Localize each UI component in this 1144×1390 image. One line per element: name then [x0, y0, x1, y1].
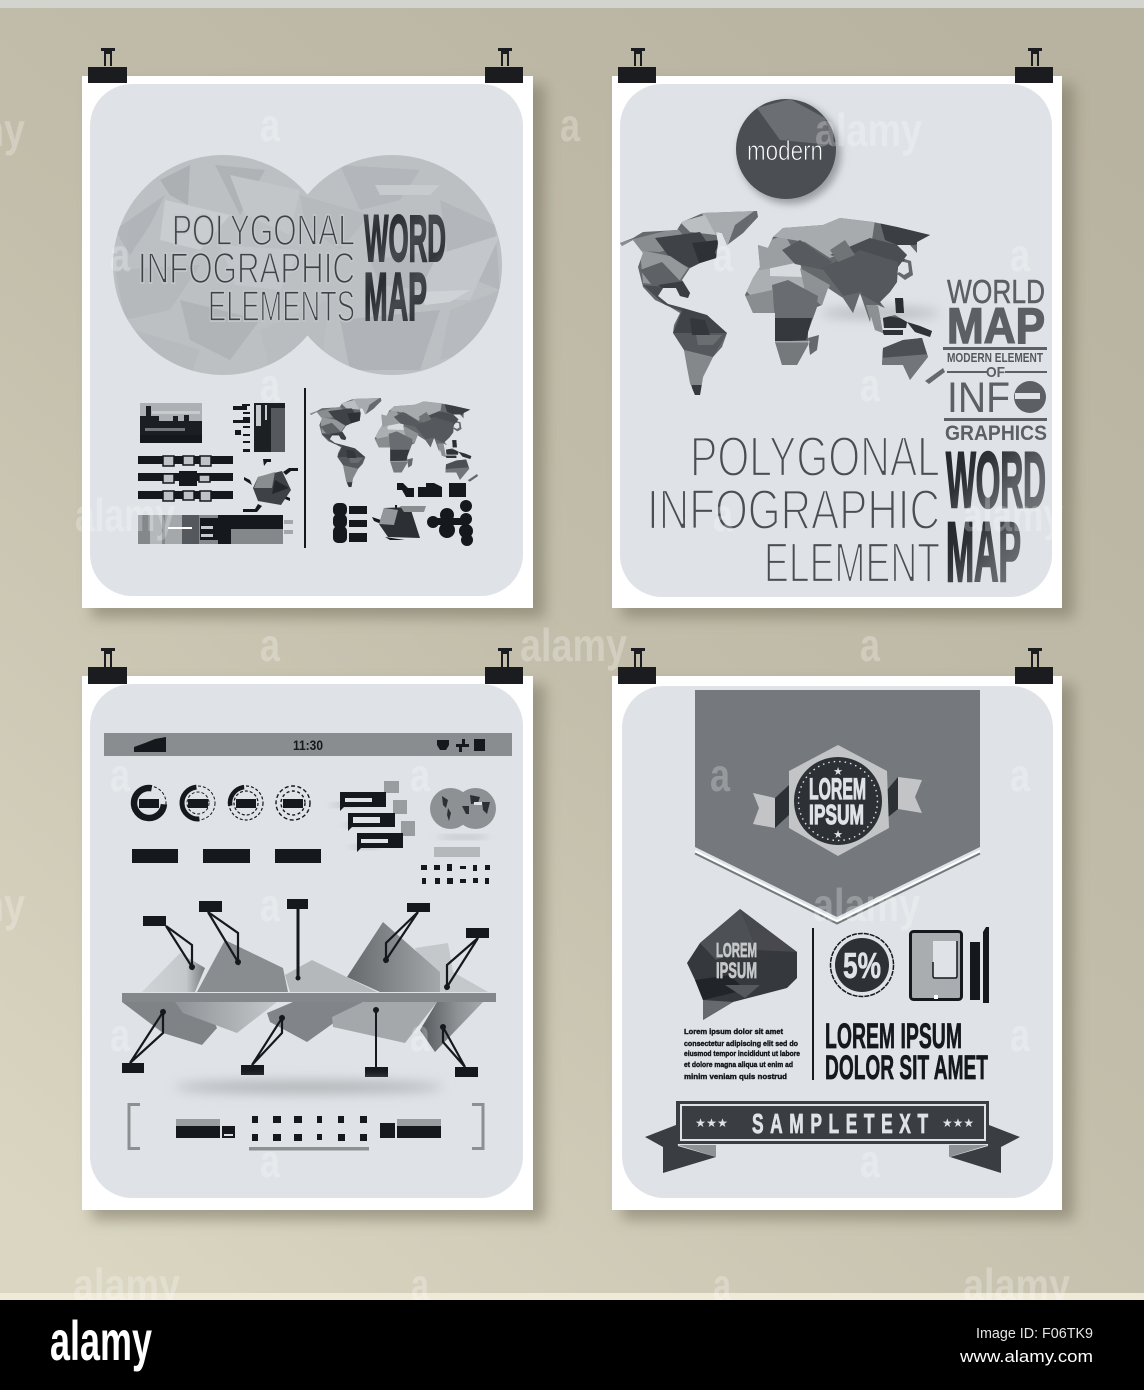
modern badge: modern: [747, 135, 823, 166]
five percent badge: 5%: [843, 945, 881, 986]
speech bubbles: [330, 781, 415, 852]
twin polygon circles: [110, 150, 510, 380]
mini list with icons: [333, 503, 367, 543]
watermarks: a: [1010, 1009, 1030, 1061]
world map lettering stack: MAP: [947, 298, 1045, 354]
progress rings: [132, 784, 310, 822]
world map lettering stack: OF: [986, 364, 1005, 381]
polygon word map lettering: MAP: [946, 505, 1021, 599]
headline: POLYGONAL: [690, 425, 940, 489]
watermarks: a: [713, 1259, 731, 1311]
poster shadows: [92, 84, 1074, 1220]
watermarks: alamy: [963, 1259, 1070, 1311]
headline: POLYGONAL: [172, 207, 355, 255]
map floor shadow: [820, 309, 940, 317]
watermarks: a: [260, 1135, 280, 1187]
hexagon badge: ★: [833, 766, 843, 778]
headline: [138, 207, 355, 331]
mini polygon burst: [372, 505, 426, 540]
modern badge: [736, 99, 841, 204]
mini node network: [427, 500, 473, 546]
lorem ipsum heading: LOREM IPSUM: [825, 1017, 962, 1056]
footer bar: alamy: [50, 1309, 152, 1372]
headline: ELEMENTS: [208, 283, 355, 331]
poster 3: interface elements: [82, 676, 533, 1210]
world map lettering stack: INF: [947, 374, 1010, 422]
watermarks: alamy: [75, 489, 175, 541]
body copy lines: et dolore magna aliqua ut enim ad: [684, 1060, 793, 1069]
watermarks: a: [110, 1009, 130, 1061]
watermarks: a: [1010, 229, 1030, 281]
footer bar: www.alamy.com: [959, 1347, 1093, 1366]
watermarks: alamy: [813, 879, 920, 931]
hexagon badge: LOREM: [809, 773, 866, 806]
status bar: [104, 733, 512, 756]
sampletext ribbon: SAMPLETEXT: [752, 1108, 928, 1139]
watermarks: alamy: [73, 1259, 180, 1311]
stacked bars panel: [138, 515, 293, 544]
world map: [615, 205, 950, 400]
body copy lines: eiusmod tempor incididunt ut labore: [684, 1049, 800, 1058]
watermarks: a: [260, 619, 280, 671]
bracketed footer legend: [129, 1104, 483, 1150]
poster 2: world map: [612, 76, 1062, 608]
watermarks: alamy: [520, 619, 627, 671]
watermarks: a: [260, 99, 280, 151]
polygon speech bubble: LOREM: [716, 940, 757, 962]
vertical divider: [812, 928, 814, 1080]
sampletext ribbon: [645, 1101, 1020, 1173]
small icon grid: [421, 864, 490, 884]
footer bar: Image ID: F06TK9: [976, 1325, 1093, 1342]
grey field: [434, 847, 480, 857]
watermarks: a: [860, 1135, 880, 1187]
mini ladder and columns: [233, 403, 285, 452]
watermarks: a: [860, 619, 880, 671]
flow rows: [138, 456, 233, 501]
lorem ipsum heading: DOLOR SIT AMET: [825, 1049, 988, 1087]
body copy lines: Lorem ipsum dolor sit amet: [684, 1027, 783, 1036]
binder clips: [88, 48, 1053, 684]
watermarks: a: [410, 1009, 430, 1061]
peak leaders and labels: [122, 899, 489, 1077]
top strip: [0, 0, 1144, 8]
ring captions: [132, 849, 321, 863]
watermarks: a: [411, 1259, 429, 1311]
watermarks: a: [860, 359, 880, 411]
polygon speech bubble: IPSUM: [716, 958, 757, 983]
watermarks: a: [260, 359, 280, 411]
watermarks: alamy: [963, 489, 1063, 541]
watermarks: a: [713, 229, 733, 281]
polygon word map lettering: [946, 435, 1046, 599]
body copy lines: minim veniam quis nostrud: [684, 1072, 787, 1081]
poster 4: lorem ipsum badges: [612, 676, 1062, 1210]
mini world map: [307, 395, 481, 490]
hexagon badge: IPSUM: [809, 799, 864, 830]
five percent badge: [830, 934, 894, 996]
watermarks: a: [110, 749, 130, 801]
polygon word map lettering: [364, 201, 446, 335]
poster 1: polygonal infographic elements: [82, 76, 533, 608]
world map lettering stack: [943, 273, 1047, 445]
watermarks: a: [110, 229, 130, 281]
headline: INFOGRAPHIC: [138, 245, 355, 293]
footer bar: [0, 1300, 1144, 1390]
body copy lines: [684, 1027, 800, 1081]
watermarks: a: [710, 749, 730, 801]
headline: ELEMENT: [764, 531, 940, 595]
polygon spider diagram: [243, 459, 298, 512]
wall bottom edge: [0, 1293, 1144, 1300]
watermarks: alamy: [815, 104, 922, 156]
pens icon: [970, 927, 989, 1003]
mini bar chart: [140, 403, 202, 443]
lorem ipsum heading: [825, 1017, 988, 1087]
sampletext ribbon: ★★★: [695, 1116, 728, 1130]
vertical divider: [304, 388, 306, 548]
status bar: 11:30: [293, 737, 323, 753]
headline: [647, 425, 940, 595]
polygon peaks chart: [122, 922, 496, 1052]
polygon word map lettering: MAP: [364, 259, 427, 335]
body copy lines: consectetur adipiscing elit sed do: [684, 1039, 798, 1048]
mini top cluster: [397, 483, 466, 497]
watermarks: a: [560, 99, 580, 151]
world map lettering stack: MODERN ELEMENT: [947, 350, 1043, 365]
hexagon badge: [753, 745, 922, 856]
poster 1: polygonal infographic elements: WORD: [364, 201, 446, 275]
world map lettering stack: GRAPHICS: [945, 422, 1047, 445]
world map lettering stack: WORLD: [947, 273, 1045, 310]
chart floor shadow: [174, 1081, 444, 1093]
tablet icon: [910, 932, 962, 1000]
watermarks: a: [410, 749, 430, 801]
headline: INFOGRAPHIC: [647, 478, 940, 542]
hexagon badge: ★: [833, 829, 843, 841]
watermarks: a: [713, 489, 733, 541]
sampletext ribbon: ★★★: [942, 1116, 974, 1130]
watermarks: a: [260, 879, 280, 931]
polygon speech bubble: [687, 909, 797, 1020]
watermarks: a: [1010, 749, 1030, 801]
mini globe circles: [430, 788, 496, 839]
pennant banner: [695, 690, 980, 924]
